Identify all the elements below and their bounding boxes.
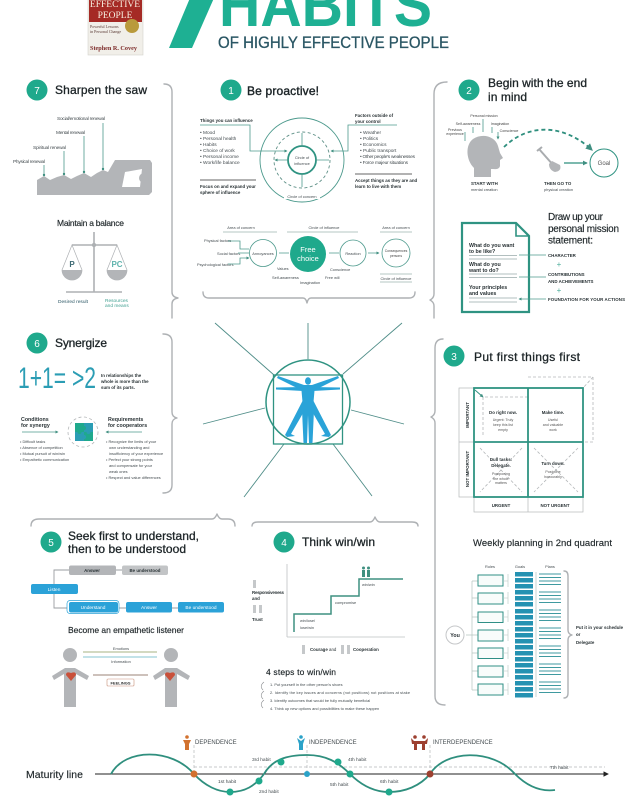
- staircase chart: Trust: [252, 617, 263, 622]
- badge 2: [458, 80, 480, 100]
- weekly planner diagram: or: [576, 632, 581, 637]
- panel: habit 4 think win/win: [252, 532, 410, 711]
- mission document: What do you want: [469, 243, 515, 249]
- mission statement list: FOUNDATION FOR YOUR ACTIONS: [548, 297, 625, 302]
- priority matrix: Do right now.: [489, 410, 517, 415]
- head silhouette with labels: Self-awareness: [456, 122, 481, 126]
- balance scale: Resources: [105, 298, 129, 304]
- bracket: habit 4: [252, 517, 418, 526]
- left list: things you can influence: Things you can influence: [200, 118, 253, 123]
- priority matrix: the whole: [493, 477, 509, 481]
- balance scale: PC: [111, 260, 123, 269]
- priority matrix: NOT URGENT: [540, 503, 570, 508]
- right list: factors outside your control: [331, 113, 418, 189]
- label: maturity line: Maturity line: [26, 769, 83, 781]
- requirements for cooperators: Requirements: [108, 417, 143, 423]
- free choice flow diagram: Annoyances: [252, 251, 274, 256]
- heading: think win/win: Think win/win: [302, 535, 375, 549]
- heading: weekly planning: Weekly planning in 2nd quadrant: [473, 538, 612, 549]
- steps list: 1. Put yourself in the other person's shoes: [270, 682, 343, 687]
- you node: You: [450, 633, 460, 639]
- dashed arc arrow: [504, 130, 592, 150]
- priority matrix: Delegate.: [491, 463, 511, 468]
- staircase chart: Cooperation: [353, 647, 379, 652]
- requirements for cooperators: • Respect and value differences: [106, 475, 161, 480]
- equation note: whole is more than the: [100, 379, 149, 384]
- panel: habit 3 put first things first: [444, 346, 624, 698]
- badge 7: 7: [34, 86, 40, 97]
- staircase chart: Courage: [310, 647, 328, 652]
- badge 1: [220, 80, 242, 100]
- mission statement list: +: [557, 286, 562, 295]
- left list: things you can influence: • Choice of work: [200, 148, 235, 154]
- goal circle: [590, 149, 618, 177]
- heading: begin with the end: [488, 76, 587, 104]
- staircase chart: compromise: [335, 600, 356, 605]
- heading: begin with the end: Begin with the end: [488, 76, 587, 90]
- free choice flow diagram: Self-awareness: [272, 275, 299, 280]
- free choice flow diagram: choice: [297, 254, 319, 263]
- heading: mission statement: personal mission: [548, 224, 619, 235]
- rays: [203, 323, 404, 497]
- head silhouette with labels: [446, 114, 518, 192]
- conditions for synergy: for synergy: [21, 423, 50, 429]
- maturity curve: [111, 754, 555, 792]
- right list: factors outside your control: Factors outside of: [355, 113, 394, 118]
- priority matrix: Turn down.: [541, 461, 565, 466]
- listening flow: Answer: [84, 568, 100, 573]
- habit labels: 7th habit: [550, 765, 569, 771]
- badge 2: 2: [466, 86, 472, 97]
- heading: mission statement: Draw up your: [548, 212, 604, 223]
- badge 6: [26, 332, 48, 354]
- arrow to goal: [564, 162, 587, 164]
- badge 4: [274, 532, 294, 552]
- bracket: habit 6: [163, 334, 177, 493]
- stage: independence: [297, 735, 357, 750]
- staircase chart: win/lose/: [300, 618, 316, 623]
- bracket: habit 3: [431, 339, 445, 705]
- priority matrix: Dull tasks:: [490, 457, 513, 462]
- balance scale: Desired result: [58, 299, 89, 305]
- mission statement list: +: [557, 260, 562, 269]
- panel: habit 1 be proactive: [197, 80, 418, 303]
- badge 4: 4: [281, 538, 287, 549]
- person right: [153, 648, 190, 707]
- heading: mission statement: [548, 212, 619, 246]
- listening flow: Listen: [48, 587, 61, 593]
- priority matrix: Urgent: Truly: [493, 418, 513, 422]
- free choice flow diagram: Psychological factors: [197, 262, 234, 267]
- weekly planner diagram: Put it in your schedule: [576, 625, 624, 630]
- shovel: [537, 147, 573, 192]
- empathetic listener illustration: [52, 646, 190, 707]
- habit labels: 6th habit: [380, 779, 399, 785]
- weekly planner diagram: Delegate: [576, 640, 595, 645]
- left list: things you can influence: Focus on and expand your: [200, 184, 256, 189]
- conditions for synergy: • Empathetic communication: [20, 457, 69, 462]
- requirements for cooperators: own understanding and: [109, 445, 149, 450]
- book cover: Stephen R. Covey: [90, 45, 138, 52]
- habit labels: 1st habit: [218, 779, 237, 785]
- staircase chart: [252, 564, 405, 654]
- priority matrix: empty: [498, 428, 508, 432]
- conditions for synergy: [20, 417, 69, 462]
- badge 3: [444, 346, 464, 366]
- free choice flow diagram: Conscience: [330, 267, 350, 272]
- balance scale: [58, 232, 129, 309]
- listening flow: [31, 566, 224, 614]
- saw illustration: Spiritual renewal: [33, 145, 66, 151]
- right list: factors outside your control: • Economics: [360, 142, 387, 148]
- mission statement list: CONTRIBUTIONS: [548, 272, 585, 277]
- head silhouette with labels: experience: [446, 132, 464, 136]
- stage: dependence: DEPENDENCE: [195, 740, 237, 746]
- requirements for cooperators: • Perfect your strong points: [106, 457, 153, 462]
- badge 1: 1: [228, 86, 234, 97]
- human figure: [276, 376, 340, 443]
- conditions for synergy: • Difficult tasks: [20, 439, 45, 444]
- free choice flow diagram: Circle of influence: [309, 225, 339, 230]
- empathetic listener illustration: Emotions: [113, 646, 129, 651]
- mission document: to be like?: [469, 249, 495, 255]
- staircase chart: and: [252, 596, 260, 601]
- head silhouette with labels: Personal mission: [470, 114, 498, 118]
- priority matrix: IMPORTANT: [465, 402, 470, 428]
- listening flow: Be understood: [185, 605, 217, 611]
- priority matrix: Useful: [548, 418, 558, 422]
- listening flow: Be understood: [130, 568, 161, 573]
- planner bracket: [564, 571, 572, 698]
- panel: habit 5 seek first to understand: [31, 529, 224, 707]
- person left: [52, 648, 89, 707]
- circle of influence diagram: [260, 118, 344, 202]
- stage: dependence: [183, 735, 237, 750]
- you node: [446, 626, 464, 644]
- hearts: [66, 672, 76, 681]
- conditions for synergy: Conditions: [21, 417, 49, 423]
- free choice flow diagram: Consequences: [385, 249, 408, 253]
- goal circle: Goal: [598, 161, 610, 167]
- shovel: physical creation: [544, 187, 573, 192]
- circle of influence diagram: influence: [294, 161, 310, 166]
- left list: things you can influence: • Mood: [200, 130, 215, 136]
- badge 5: 5: [48, 538, 54, 549]
- free choice flow diagram: Circle of influence: [381, 276, 411, 281]
- free choice flow diagram: Physical factors: [204, 238, 231, 243]
- weekly planner diagram: Roles: [485, 564, 495, 569]
- free choice flow diagram: Area of concern: [227, 225, 255, 230]
- mission document: and values: [469, 291, 496, 297]
- panel: habit 2 begin with the end in mind: [446, 76, 625, 312]
- equation note: [100, 373, 149, 390]
- bracket: top-left: [164, 84, 178, 318]
- heading: mission statement: statement:: [548, 236, 593, 246]
- habit labels: 5th habit: [330, 782, 349, 788]
- staircase chart: lose/win: [300, 625, 314, 630]
- listening flow: Understand: [81, 605, 106, 611]
- saw illustration: [13, 116, 152, 195]
- left list: things you can influence: [200, 118, 287, 195]
- shovel: THEN GO TO: [544, 181, 572, 186]
- stage: interdependence: [411, 735, 493, 750]
- curve markers: [190, 758, 434, 796]
- book cover: [88, 0, 143, 55]
- weekly planner diagram: Goals: [515, 564, 525, 569]
- staircase chart: Responsiveness: [252, 590, 285, 595]
- empathetic listener illustration: Information: [111, 659, 131, 664]
- left list: things you can influence: sphere of influence: [200, 190, 241, 195]
- habit labels: [218, 757, 569, 795]
- priority matrix: URGENT: [492, 503, 511, 508]
- priority matrix: keep this list: [493, 423, 513, 427]
- panel: central vitruvian figure: [203, 323, 404, 497]
- requirements for cooperators: • Recognize the limits of your: [106, 439, 157, 444]
- badge 6: 6: [34, 339, 40, 350]
- priority matrix: and valuable: [543, 423, 563, 427]
- left list: things you can influence: • Habits: [200, 142, 217, 148]
- staircase chart: win/win: [362, 582, 375, 587]
- right list: factors outside your control: Accept things as they are and: [355, 178, 418, 183]
- bracket: top-right: [430, 82, 447, 318]
- stage: interdependence: INTERDEPENDENCE: [433, 740, 493, 746]
- book cover: in Personal Change: [90, 29, 121, 34]
- head silhouette with labels: Conscience: [500, 129, 518, 133]
- mission document: want to do?: [468, 268, 499, 274]
- habit labels: 4th habit: [348, 757, 367, 763]
- priority matrix: matters: [495, 481, 507, 485]
- panel: habit 7 sharpen the saw: [13, 80, 152, 309]
- priority matrix: honourably: [544, 475, 562, 479]
- head silhouette with labels: mental creation: [471, 187, 498, 192]
- steps list: 2. Identify the key issues and concerns (not positions) not positions at stake: [270, 690, 410, 695]
- heading: be proactive: Be proactive!: [247, 84, 319, 98]
- heading: synergize: Synergize: [55, 336, 107, 350]
- right list: factors outside your control: learn to live with them: [355, 184, 401, 189]
- right list: factors outside your control: • Public transport: [360, 148, 397, 154]
- empathetic listener illustration: FEELINGS: [110, 680, 131, 686]
- circle of influence diagram: Circle of: [295, 155, 310, 160]
- requirements for cooperators: insufficiency of your experience: [109, 451, 163, 456]
- head silhouette with labels: Previous: [448, 128, 462, 132]
- book cover: Powerful Lessons: [90, 24, 119, 29]
- heading: put first things first: Put first things first: [474, 350, 581, 364]
- requirements for cooperators: and compensate for your: [109, 463, 153, 468]
- balance scale: and means: [105, 303, 129, 309]
- priority matrix: work: [549, 428, 557, 432]
- panel: habit 6 synergize: [18, 332, 163, 480]
- free choice flow diagram: Values: [277, 266, 289, 271]
- equation note: In relationships the: [101, 373, 142, 378]
- badge 7: [26, 80, 48, 100]
- axis: [95, 773, 608, 775]
- free choice flow diagram: [197, 225, 412, 285]
- right list: factors outside your control: • Force majeur situations: [360, 160, 409, 166]
- mission statement list: AND ACHIEVEMENTS: [548, 279, 594, 284]
- left list: things you can influence: • Work/life balance: [200, 160, 240, 166]
- saw illustration: Physical renewal: [13, 159, 45, 165]
- conditions for synergy: • Absence of competition: [20, 445, 63, 450]
- heading: 4 steps to win/win: 4 steps to win/win: [266, 667, 336, 677]
- equation note: sum of its parts.: [101, 385, 135, 390]
- right list: factors outside your control: • Other people's weaknesses: [360, 154, 416, 160]
- right list: factors outside your control: • Weather: [360, 130, 381, 136]
- mission statement list: [519, 253, 625, 302]
- free choice flow diagram: Free will: [325, 275, 340, 280]
- steps list: 3. Identify outcomes that would be fully mutually beneficial: [270, 698, 370, 703]
- free choice flow diagram: Area of concern: [382, 225, 410, 230]
- book cover: EFFECTIVE: [90, 0, 140, 10]
- requirements for cooperators: weak ones: [109, 469, 128, 474]
- badge 5: [40, 532, 62, 552]
- heading: seek first to understand: then to be understood: [68, 542, 186, 556]
- requirements for cooperators: [106, 417, 163, 480]
- balance scale: P: [69, 260, 75, 269]
- bottom bracket: [203, 292, 415, 303]
- book cover: PEOPLE: [98, 11, 133, 21]
- free choice flow diagram: persons: [390, 254, 402, 258]
- head silhouette with labels: START WITH: [471, 181, 498, 186]
- saw illustration: Mental renewal: [56, 130, 85, 136]
- mission document: Your principles: [469, 285, 507, 291]
- heading: empathetic listener: Become an empathetic listener: [68, 625, 184, 635]
- free choice flow diagram: Free: [300, 245, 316, 254]
- left list: things you can influence: • Personal income: [200, 154, 239, 160]
- habit labels: 3rd habit: [252, 757, 271, 763]
- priority matrix: Make time.: [542, 410, 564, 415]
- heading: begin with the end: in mind: [488, 90, 527, 104]
- free choice flow diagram: Reaction: [345, 251, 361, 256]
- title: OF HIGHLY EFFECTIVE PEOPLE: [218, 34, 449, 52]
- staircase chart: and: [329, 647, 337, 652]
- badge 3: 3: [451, 352, 457, 363]
- right list: factors outside your control: • Politics: [360, 136, 379, 142]
- equation: 1+1= >2: [18, 362, 96, 395]
- listening flow: Answer: [141, 605, 157, 611]
- head silhouette with labels: Imagination: [491, 122, 509, 126]
- stage: independence: INDEPENDENCE: [309, 740, 357, 746]
- steps list: 4. Think up new options and possibilities to make these happen: [270, 706, 379, 711]
- heading: seek first to understand: [68, 529, 199, 556]
- panel: maturity line: [26, 735, 608, 796]
- heading: sharpen the saw: Sharpen the saw: [55, 83, 147, 97]
- mission statement list: CHARACTER: [548, 253, 577, 258]
- right list: factors outside your control: your control: [355, 119, 381, 124]
- circle and square: [266, 360, 350, 444]
- dashed guides: [194, 745, 605, 774]
- priority matrix: NOT IMPORTANT: [465, 451, 470, 487]
- left list: things you can influence: • Personal health: [200, 136, 237, 142]
- saw illustration: Social/emotional renewal: [57, 116, 105, 122]
- title: [169, 0, 449, 52]
- priority matrix: Postponing: [492, 472, 510, 476]
- puzzle icon: [68, 417, 98, 447]
- conditions for synergy: • Mutual pursuit of win/win: [20, 451, 65, 456]
- heading: maintain a balance: Maintain a balance: [57, 218, 124, 228]
- heading: seek first to understand: Seek first to understand,: [68, 529, 199, 543]
- requirements for cooperators: for cooperators: [108, 423, 147, 429]
- circle of influence diagram: Circle of concern: [287, 194, 317, 199]
- bracket: habit 5: [31, 514, 235, 526]
- mission document: What do you: [469, 262, 501, 268]
- priority matrix: [459, 377, 593, 512]
- free choice flow diagram: Social factors: [217, 251, 240, 256]
- weekly planner diagram: Plans: [545, 564, 555, 569]
- priority matrix: Postpone: [545, 470, 561, 474]
- weekly planner diagram: [446, 564, 624, 698]
- mission document: [462, 223, 529, 312]
- free choice flow diagram: Imagination: [300, 280, 320, 285]
- steps list: [261, 682, 410, 711]
- habit labels: 2nd habit: [259, 789, 279, 795]
